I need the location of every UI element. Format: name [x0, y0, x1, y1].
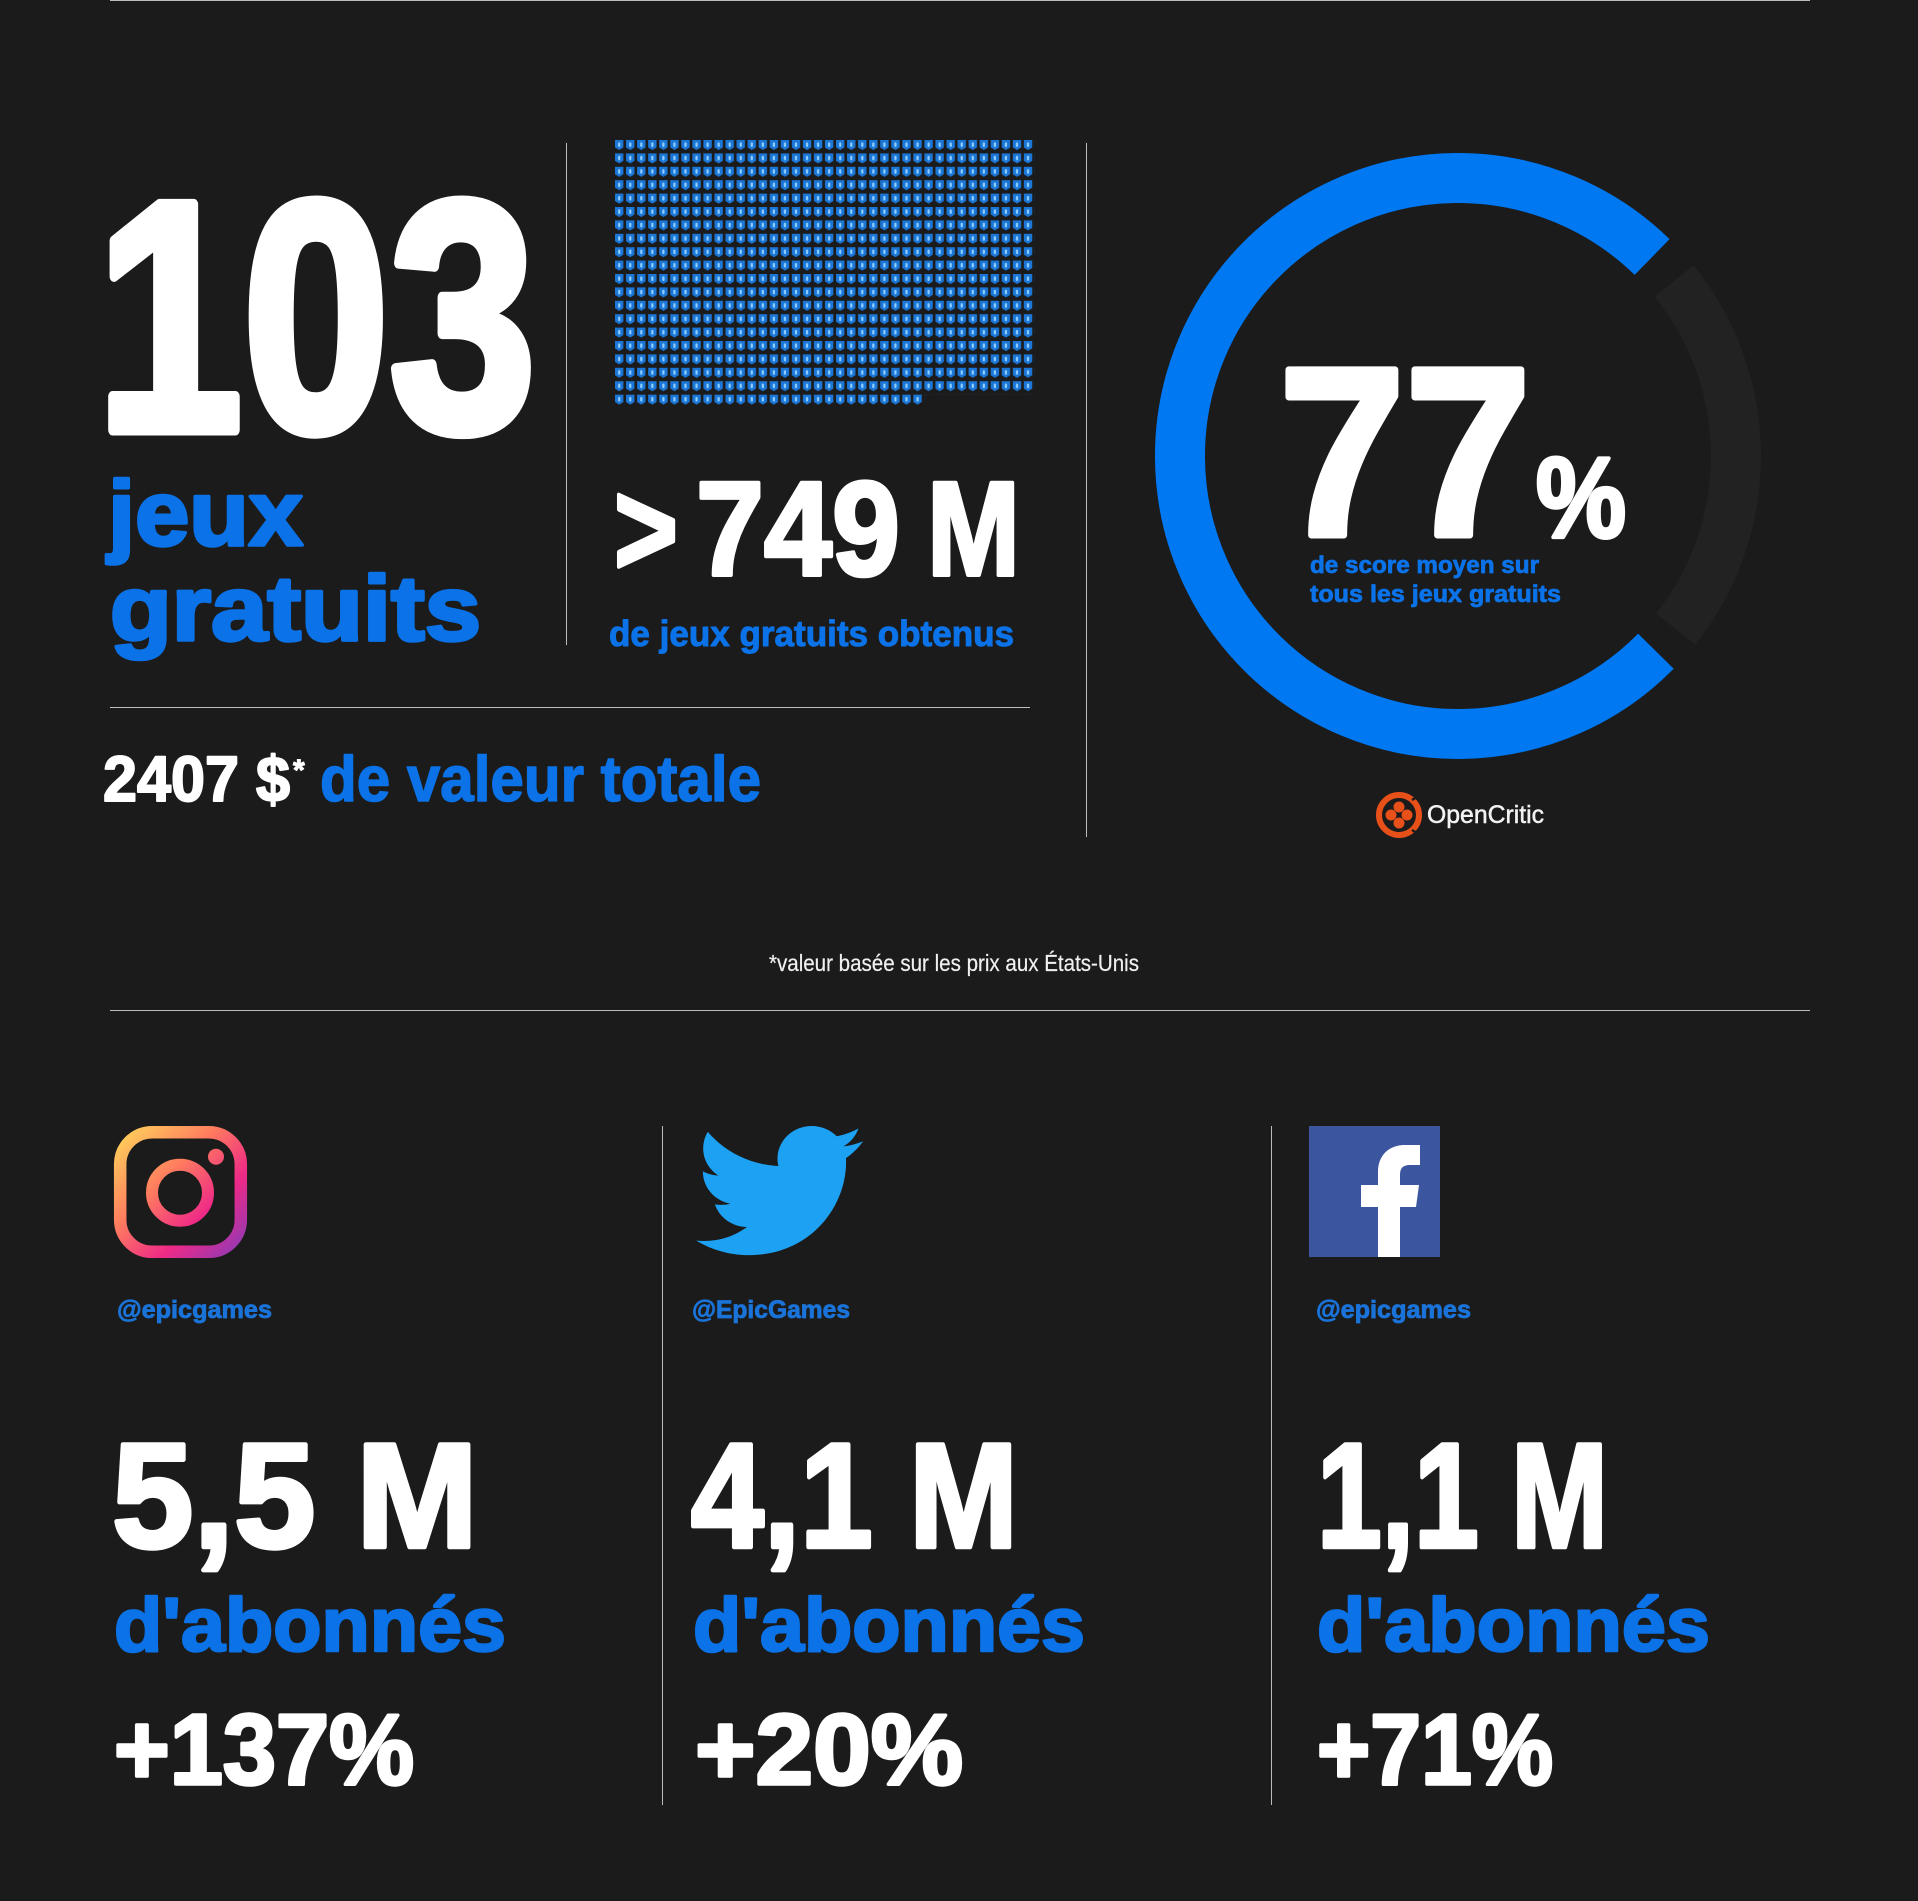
- label: jeux: jeux: [106, 463, 303, 565]
- handle: @EpicGames: [692, 1296, 850, 1324]
- followers number: 4,1 M: [691, 1412, 1018, 1579]
- label: gratuits: gratuits: [110, 558, 481, 660]
- handle: @epicgames: [1316, 1296, 1471, 1324]
- handle: @epicgames: [117, 1296, 272, 1324]
- icon: Twitter: [696, 1126, 863, 1255]
- followers label: d'abonnés: [1317, 1583, 1710, 1668]
- logo: OpenCritic: OpenCritic: [1427, 801, 1544, 829]
- big number 749 M: M: [927, 455, 1020, 604]
- percent sign: %: [1536, 435, 1626, 562]
- growth: +71%: [1317, 1694, 1553, 1806]
- amount 2407 dollars: 2407 $: [103, 743, 290, 815]
- growth: +20%: [695, 1694, 963, 1806]
- asterisk: *: [293, 754, 305, 787]
- panel: Instagram: [112, 1132, 506, 1806]
- icon grid: 749 coins: [615, 140, 1035, 408]
- big number 749 M: [614, 455, 1020, 604]
- logo: OpenCritic: [1379, 795, 1544, 835]
- panel: total value: [103, 743, 761, 815]
- followers number: 1,1 M: [1317, 1412, 1608, 1579]
- caption: total value: de valeur totale: [320, 743, 761, 815]
- icon: Facebook: [1309, 1126, 1440, 1257]
- growth: +137%: [114, 1694, 414, 1806]
- followers number: 5,5 M: [112, 1412, 478, 1579]
- panel: Twitter: [691, 1126, 1085, 1806]
- panel: Facebook: [1309, 1126, 1710, 1806]
- ring chart: 77 percent: [1180, 178, 1736, 734]
- caption: score line 2: tous les jeux gratuits: [1310, 581, 1561, 608]
- panel: average score: [1180, 178, 1736, 835]
- panel: free games count: [96, 133, 536, 660]
- followers label: d'abonnés: [693, 1583, 1085, 1668]
- caption: games claimed: de jeux gratuits obtenus: [609, 613, 1014, 654]
- panel: games claimed: [609, 140, 1035, 654]
- big number 749 M: 749: [696, 455, 900, 604]
- followers label: d'abonnés: [114, 1583, 506, 1668]
- big number 77: 77: [1279, 318, 1531, 586]
- icon: Instagram: [120, 1132, 241, 1252]
- big number 103: 103: [96, 133, 536, 500]
- big number 749 M: >: [614, 455, 678, 604]
- footnote: *valeur basée sur les prix aux États-Unis: [769, 950, 1139, 976]
- caption: score line 1: de score moyen sur: [1310, 552, 1539, 579]
